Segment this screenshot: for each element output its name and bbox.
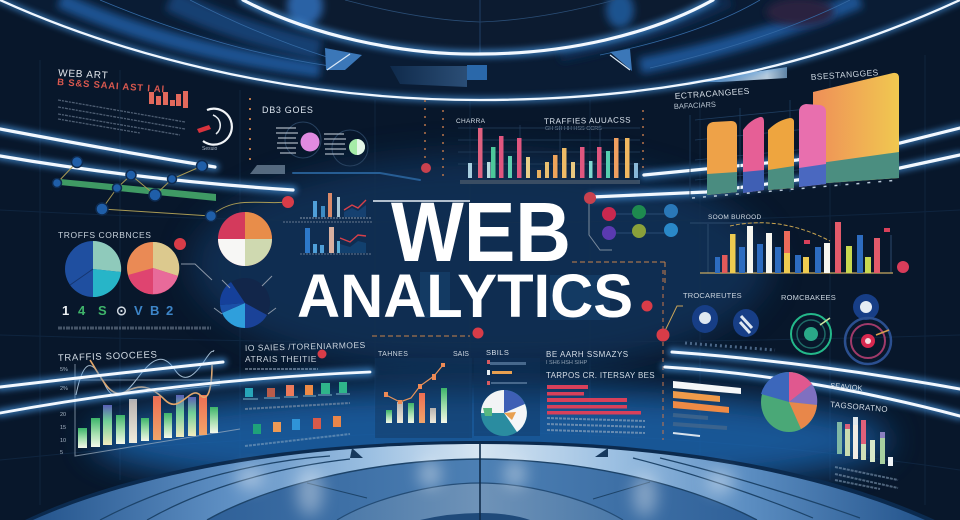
panel: web art summary — [57, 68, 232, 152]
number row — [62, 303, 173, 318]
heading: TAHNES — [378, 351, 408, 358]
bar two — [743, 117, 764, 193]
heading: SOOM BUROOD — [708, 214, 762, 221]
wall light strips lower right — [665, 352, 960, 416]
bars — [468, 128, 638, 178]
panel: savior rating — [830, 381, 898, 489]
small label: SAIS — [453, 351, 469, 358]
title: WEB — [391, 185, 571, 279]
panel: db3 goes — [250, 98, 368, 174]
dashed timeline — [642, 270, 683, 440]
badge one — [692, 305, 718, 333]
axis strip — [460, 180, 640, 184]
heading: DB3 GOES — [262, 105, 314, 115]
connector — [589, 204, 612, 250]
shelf — [250, 165, 285, 174]
trend line — [386, 365, 443, 402]
panel: circle icons — [584, 192, 678, 250]
connectors — [57, 162, 211, 216]
icon row two — [253, 416, 341, 434]
y labels: 10 — [60, 438, 66, 444]
y labels: 5 — [60, 450, 63, 456]
heading two: BSESTANGGES — [810, 67, 879, 82]
connector — [663, 306, 683, 335]
y labels — [60, 367, 68, 456]
heading: SBILS — [486, 348, 509, 357]
bar one — [707, 121, 737, 195]
heading two: TARPOS CR. ITERSAY BES — [546, 371, 655, 380]
footer text lines — [835, 467, 898, 489]
chart strip — [685, 343, 775, 350]
panel: trends icon grid — [243, 340, 366, 446]
right bracket — [610, 49, 632, 71]
red marker — [318, 350, 326, 358]
y labels: 5% — [60, 367, 68, 373]
connector to wheel — [181, 264, 212, 280]
baseline — [700, 272, 893, 274]
icon dots — [602, 207, 616, 221]
small flags — [804, 240, 810, 244]
subheading: ATRAIS THEITIE — [245, 354, 317, 364]
red marker lower — [656, 328, 670, 342]
panel: sales chart — [375, 351, 472, 438]
red marker — [282, 196, 294, 208]
heading: CHARRA — [456, 118, 486, 125]
body text lines — [58, 100, 185, 135]
y labels: 15 — [60, 425, 66, 431]
wall light strips lower left — [0, 362, 370, 413]
mini bar charts — [283, 193, 372, 254]
panel: sources combo chart — [690, 214, 909, 273]
green donut — [324, 130, 368, 166]
dotted divider — [249, 98, 251, 162]
heading: traffic sources: TROFFS CORBNCES — [58, 230, 152, 240]
left bracket — [325, 48, 362, 70]
title crossing line — [373, 200, 470, 202]
panel: top centre bar chart — [421, 100, 643, 184]
red ring — [845, 318, 891, 364]
number row: B — [150, 303, 159, 318]
floor — [25, 441, 935, 520]
red marker with dashed rule — [372, 328, 484, 338]
nodes — [52, 156, 216, 222]
text line — [245, 434, 350, 446]
bars — [837, 417, 893, 466]
bars — [386, 388, 447, 423]
pie chart: quadrants — [218, 212, 272, 266]
axis — [692, 180, 899, 198]
dotted dividers — [425, 100, 643, 180]
wall light strips left — [0, 129, 420, 190]
red marker — [421, 163, 431, 173]
heading: BE AARH SSMAZYS — [546, 350, 629, 359]
red marker — [897, 261, 909, 273]
heading two: TAGSORATNO — [830, 400, 888, 414]
heading: TROCAREUTES — [683, 291, 742, 300]
wall blue glow near floor — [90, 388, 890, 492]
green band — [60, 179, 216, 201]
number row: ⊙ — [116, 303, 127, 318]
network chart — [52, 156, 294, 222]
links — [609, 214, 671, 233]
panel tint — [375, 358, 472, 438]
panel: horizontal bars — [673, 381, 741, 436]
upper mini chart — [300, 193, 372, 218]
number row: V — [134, 303, 143, 318]
red marker upper — [642, 300, 652, 312]
number row: 2 — [166, 303, 173, 318]
grid — [690, 90, 899, 198]
legend list — [487, 360, 527, 385]
ceiling structure — [0, 0, 960, 100]
gauge — [197, 109, 232, 152]
bars — [78, 395, 218, 448]
ceiling block — [467, 65, 487, 80]
sub text: GH SH HH HSS CCRS — [545, 126, 602, 132]
body lines — [547, 418, 645, 433]
pink donut — [276, 122, 321, 158]
wall light strips right — [592, 128, 960, 197]
lower mini chart — [283, 222, 372, 254]
caption lines — [58, 326, 211, 330]
bars — [715, 222, 880, 273]
curves — [76, 350, 214, 396]
badge two — [733, 309, 759, 337]
light patch — [687, 67, 787, 82]
dashed rule — [572, 262, 665, 285]
gauge: Sesuio — [202, 146, 218, 152]
bar three — [768, 118, 794, 190]
grid — [458, 125, 640, 178]
sub text: I SH6 HSH SIHP — [546, 360, 588, 366]
pie chart: orange — [127, 242, 179, 294]
wall glow behind title — [190, 155, 770, 375]
heading two: TRAFFIES AUUACSS — [544, 115, 631, 126]
pie chart: five slices — [761, 372, 817, 432]
y labels: 2% — [60, 386, 68, 392]
pie — [481, 390, 527, 436]
title — [297, 185, 633, 330]
heading: ECTRACANGEES — [674, 86, 750, 101]
red bars — [547, 385, 641, 414]
icon row one — [243, 382, 350, 399]
text line — [245, 368, 318, 370]
ceiling panel left — [390, 66, 467, 87]
green ring — [791, 314, 831, 354]
text line — [245, 403, 350, 409]
y labels: 20 — [60, 412, 66, 418]
ceiling light arcs — [0, 0, 960, 100]
red subheading: B S&S SAAI AST I Al — [57, 77, 165, 96]
pie chart: navy wheel — [214, 276, 276, 328]
title: ANALYTICS — [297, 262, 633, 330]
heading: TRAFFIS SOOCEES — [58, 350, 158, 364]
heading: ROMCBAKEES — [781, 293, 836, 302]
subheading: BAFACIARS — [674, 100, 716, 111]
bar four — [799, 104, 826, 187]
panel: trocareutes badges — [683, 291, 775, 350]
number row: 1 — [62, 303, 69, 318]
large yellow area — [813, 73, 899, 184]
title backing patches — [420, 272, 610, 320]
heading: web art: WEB ART — [58, 68, 109, 82]
panel: romcbakees rings — [781, 293, 891, 364]
panel: top right area chart — [674, 67, 899, 198]
axis — [75, 364, 240, 456]
pie chart: blue — [65, 241, 121, 297]
panel: traffic sources chart — [58, 350, 240, 456]
red marker — [174, 238, 186, 250]
trend curve — [730, 223, 830, 241]
number row: S — [98, 303, 107, 318]
blue badge — [853, 294, 879, 320]
panel: sbils pie and list — [474, 348, 540, 436]
heading: IO SAIES /TORENIARMOES — [245, 340, 366, 353]
axis — [690, 223, 893, 273]
number row: 4 — [78, 303, 86, 318]
red marker — [584, 192, 596, 204]
mini red bars — [149, 91, 188, 108]
heading: SEAVIOK — [830, 381, 863, 393]
panel: search summary — [546, 350, 655, 433]
